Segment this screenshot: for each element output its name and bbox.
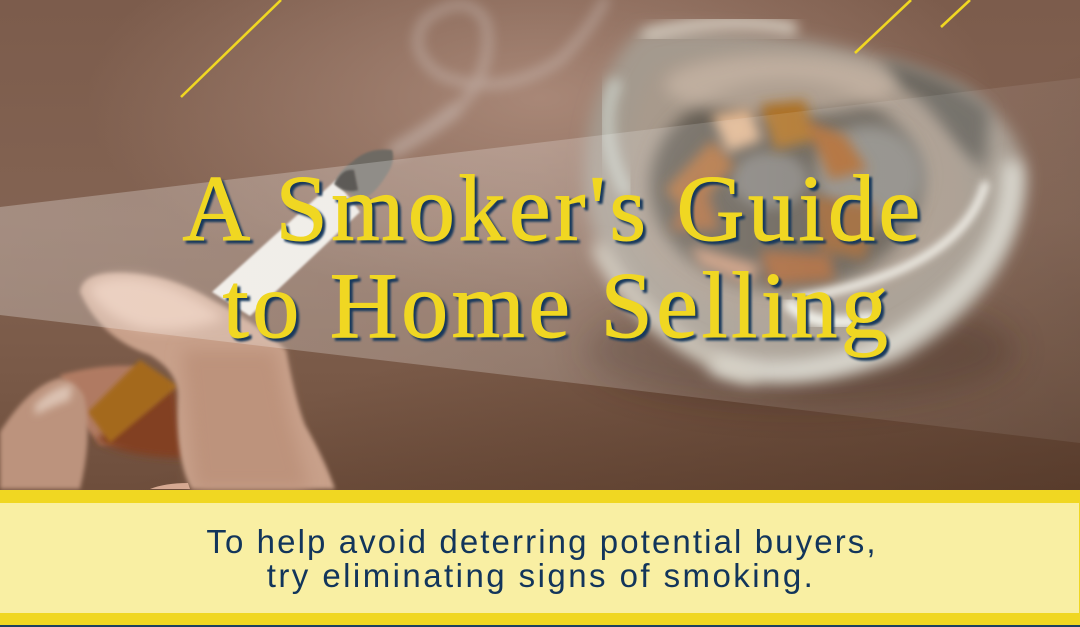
decorative yellow accent line: top left xyxy=(181,0,281,97)
dark glass shadow at back xyxy=(880,60,990,170)
title xyxy=(182,157,927,361)
cigarette ash tip xyxy=(334,150,393,198)
thumb xyxy=(0,378,88,489)
shadow under filter xyxy=(95,385,185,458)
decorative yellow accent line: top right long xyxy=(855,0,911,53)
cigarette butts in ashtray xyxy=(665,100,875,285)
ashtray xyxy=(585,23,1025,405)
title: A Smoker's Guide xyxy=(185,160,927,264)
cigarette xyxy=(212,150,393,316)
subtitle text xyxy=(206,523,878,594)
subtitle banner xyxy=(0,490,1080,627)
title: to Home Selling xyxy=(226,257,894,361)
back finger xyxy=(60,366,160,445)
glass rim highlights xyxy=(600,23,1012,375)
subtitle text: To help avoid deterring potential buyers, xyxy=(206,523,878,560)
translucent light overlay band xyxy=(0,78,1080,443)
title: A Smoker's Guide xyxy=(182,157,924,261)
background photo: smoker's hand and ashtray on wood table xyxy=(0,0,1080,490)
subtitle text: try eliminating signs of smoking. xyxy=(267,557,815,594)
cigarette filter xyxy=(88,360,178,443)
decorative yellow accent line: top right short xyxy=(941,0,970,27)
hand holding cigarette xyxy=(0,273,335,489)
smoke xyxy=(392,0,605,152)
title: to Home Selling xyxy=(223,254,891,358)
palm and index finger xyxy=(80,273,335,489)
